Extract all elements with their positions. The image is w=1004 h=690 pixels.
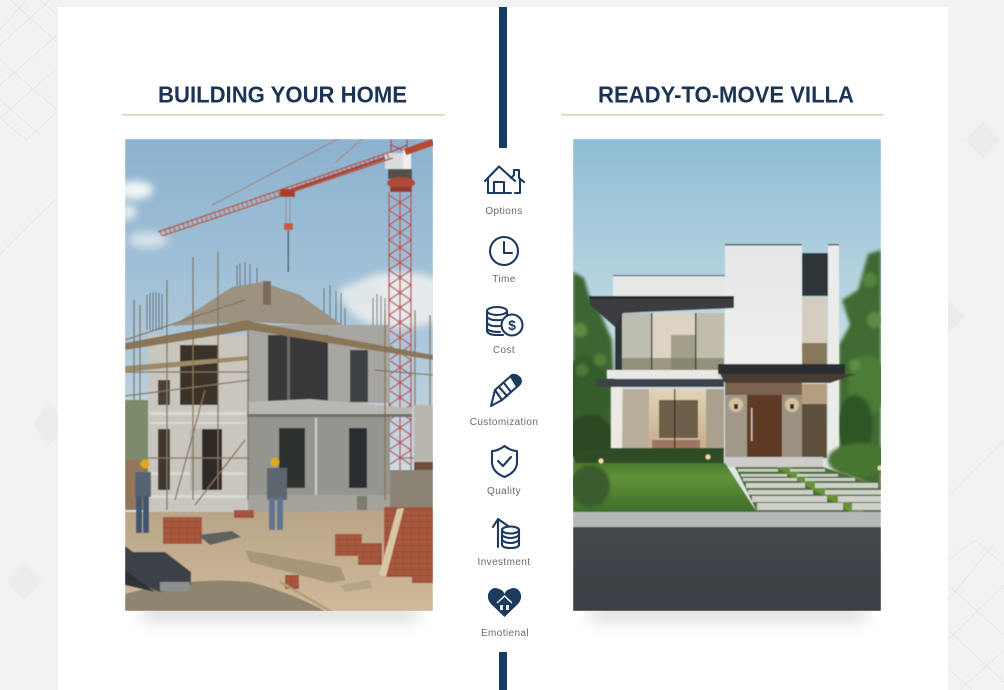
tower glass (802, 297, 827, 364)
crane cab (385, 139, 415, 192)
front door (747, 395, 782, 458)
upper glass (615, 313, 724, 370)
workers (135, 458, 367, 533)
lower floor left wall (148, 405, 248, 513)
crane tower (389, 192, 411, 470)
steps (725, 457, 823, 467)
timber (198, 508, 404, 612)
icon: arrow and coins, Investment (478, 519, 530, 568)
garden lights (598, 454, 882, 470)
balcony slab (247, 399, 412, 417)
icon: house, Options: Options (485, 206, 523, 217)
icon: shield, Quality: Quality (487, 486, 521, 497)
rebar (147, 262, 385, 330)
left heading: BUILDING YOUR HOME (158, 82, 407, 108)
mid white strip (607, 370, 718, 378)
crane hook (280, 189, 295, 272)
brick piles (163, 507, 433, 589)
icon: clock, Time (490, 237, 518, 285)
side glass (802, 384, 827, 458)
main canopy (718, 364, 856, 383)
photo: house under construction (117, 139, 455, 612)
tree right (838, 248, 881, 490)
clouds (117, 181, 455, 328)
icon: heart with house, Emotional (481, 588, 529, 639)
crane jib lattice (158, 139, 433, 236)
icon: coins and dollar, Cost: Cost (493, 345, 515, 356)
lower floor right wall (248, 416, 391, 496)
center divider bottom (499, 652, 507, 690)
icon: shield, Quality (487, 446, 521, 497)
walkway pavers (735, 467, 881, 512)
left background trees (125, 400, 148, 510)
icon: coins and dollar, Cost (487, 307, 522, 356)
eave bands (125, 320, 433, 360)
icon: heart with house, Emotional: Emotienal (481, 628, 529, 639)
tree left (573, 270, 616, 471)
upper white blocks (613, 244, 839, 450)
right heading: READY-TO-MOVE VILLA (598, 82, 854, 108)
gravel mound (125, 580, 325, 611)
icon: house, Options (485, 166, 524, 217)
photo: modern villa (561, 139, 892, 611)
icon: coins and dollar, Cost: $ (508, 317, 516, 333)
center divider top (499, 7, 507, 148)
stone walls (725, 383, 802, 458)
sidewalk (573, 512, 881, 528)
icon: arrow and coins, Investment: Investment (478, 557, 530, 568)
right shrubs (828, 443, 892, 477)
right background (390, 405, 433, 510)
lawn (573, 463, 757, 512)
scaffolding (125, 252, 433, 510)
upper floor left (148, 335, 248, 405)
image shadow left (142, 606, 418, 620)
dark stack (125, 546, 191, 592)
icon: pencil, Customization (470, 375, 538, 428)
ground floor (611, 387, 724, 450)
icon: clock, Time: Time (492, 274, 516, 285)
right lawn (823, 467, 881, 512)
roof (172, 282, 345, 327)
upper roof overhang (589, 296, 734, 327)
lower canopy left (596, 379, 724, 387)
shrubs under window (575, 448, 724, 466)
round shrub (570, 465, 610, 507)
road (573, 527, 881, 611)
upper floor right (248, 325, 390, 403)
image shadow right (590, 606, 866, 620)
ground (125, 510, 433, 611)
icon: pencil, Customization: Customization (470, 417, 538, 428)
